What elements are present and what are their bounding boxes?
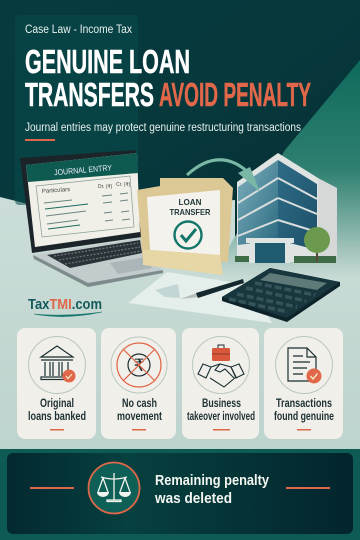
card label: Transactions <box>276 398 332 410</box>
illustration: arrow to building <box>187 160 260 192</box>
icon: bank with check <box>28 336 86 394</box>
conclusion text: Remaining penalty <box>155 472 270 489</box>
illustration: laptop: Particulars <box>42 187 70 195</box>
card label: No cash <box>122 398 157 410</box>
illustration: calculator <box>222 268 340 322</box>
icon: briefcase and handshake <box>192 336 250 394</box>
folder label: LOAN <box>178 197 202 207</box>
card label: Business <box>202 398 241 410</box>
subtitle: Journal entries may protect genuine restructuring transactions <box>25 122 301 134</box>
card label: found genuine <box>274 411 334 423</box>
icon: scales of justice <box>88 462 140 514</box>
illustration: laptop: Dr. (₹) <box>98 184 113 190</box>
title: TRANSFERS <box>25 76 154 113</box>
card label <box>117 398 162 423</box>
card: no cash movement <box>101 328 176 439</box>
card: original loans banked <box>17 328 96 439</box>
card: transactions found genuine <box>264 328 343 439</box>
illustration: laptop: JOURNAL ENTRY <box>54 163 113 177</box>
icon: check circle <box>174 222 202 248</box>
title: GENUINE LOAN <box>25 43 190 80</box>
card label: loans banked <box>28 411 86 423</box>
illustration: laptop <box>20 150 163 287</box>
illustration: office building <box>235 153 337 263</box>
card label <box>187 398 255 423</box>
card: business takeover involved <box>182 328 259 439</box>
illustration: loan transfer folder: TRANSFER <box>170 207 210 217</box>
conclusion banner <box>0 449 360 540</box>
card label <box>28 398 86 423</box>
category label: Case Law - Income Tax <box>25 24 132 36</box>
illustration: paper and pen <box>128 272 272 323</box>
logo: TaxTMI.com: TaxTMI.com <box>28 296 102 313</box>
illustration: loan transfer folder <box>137 178 233 275</box>
card label <box>274 398 334 423</box>
card label: takeover involved <box>187 411 255 423</box>
icon: no rupee: ₹ <box>134 356 144 376</box>
card label: movement <box>117 411 162 423</box>
illustration: laptop: Cr. (₹) <box>116 182 131 188</box>
card label: Original <box>40 398 74 410</box>
icon: document with check <box>276 336 332 394</box>
conclusion text: was deleted <box>154 490 232 507</box>
title <box>25 43 311 113</box>
header <box>25 24 311 141</box>
conclusion text <box>154 472 270 507</box>
